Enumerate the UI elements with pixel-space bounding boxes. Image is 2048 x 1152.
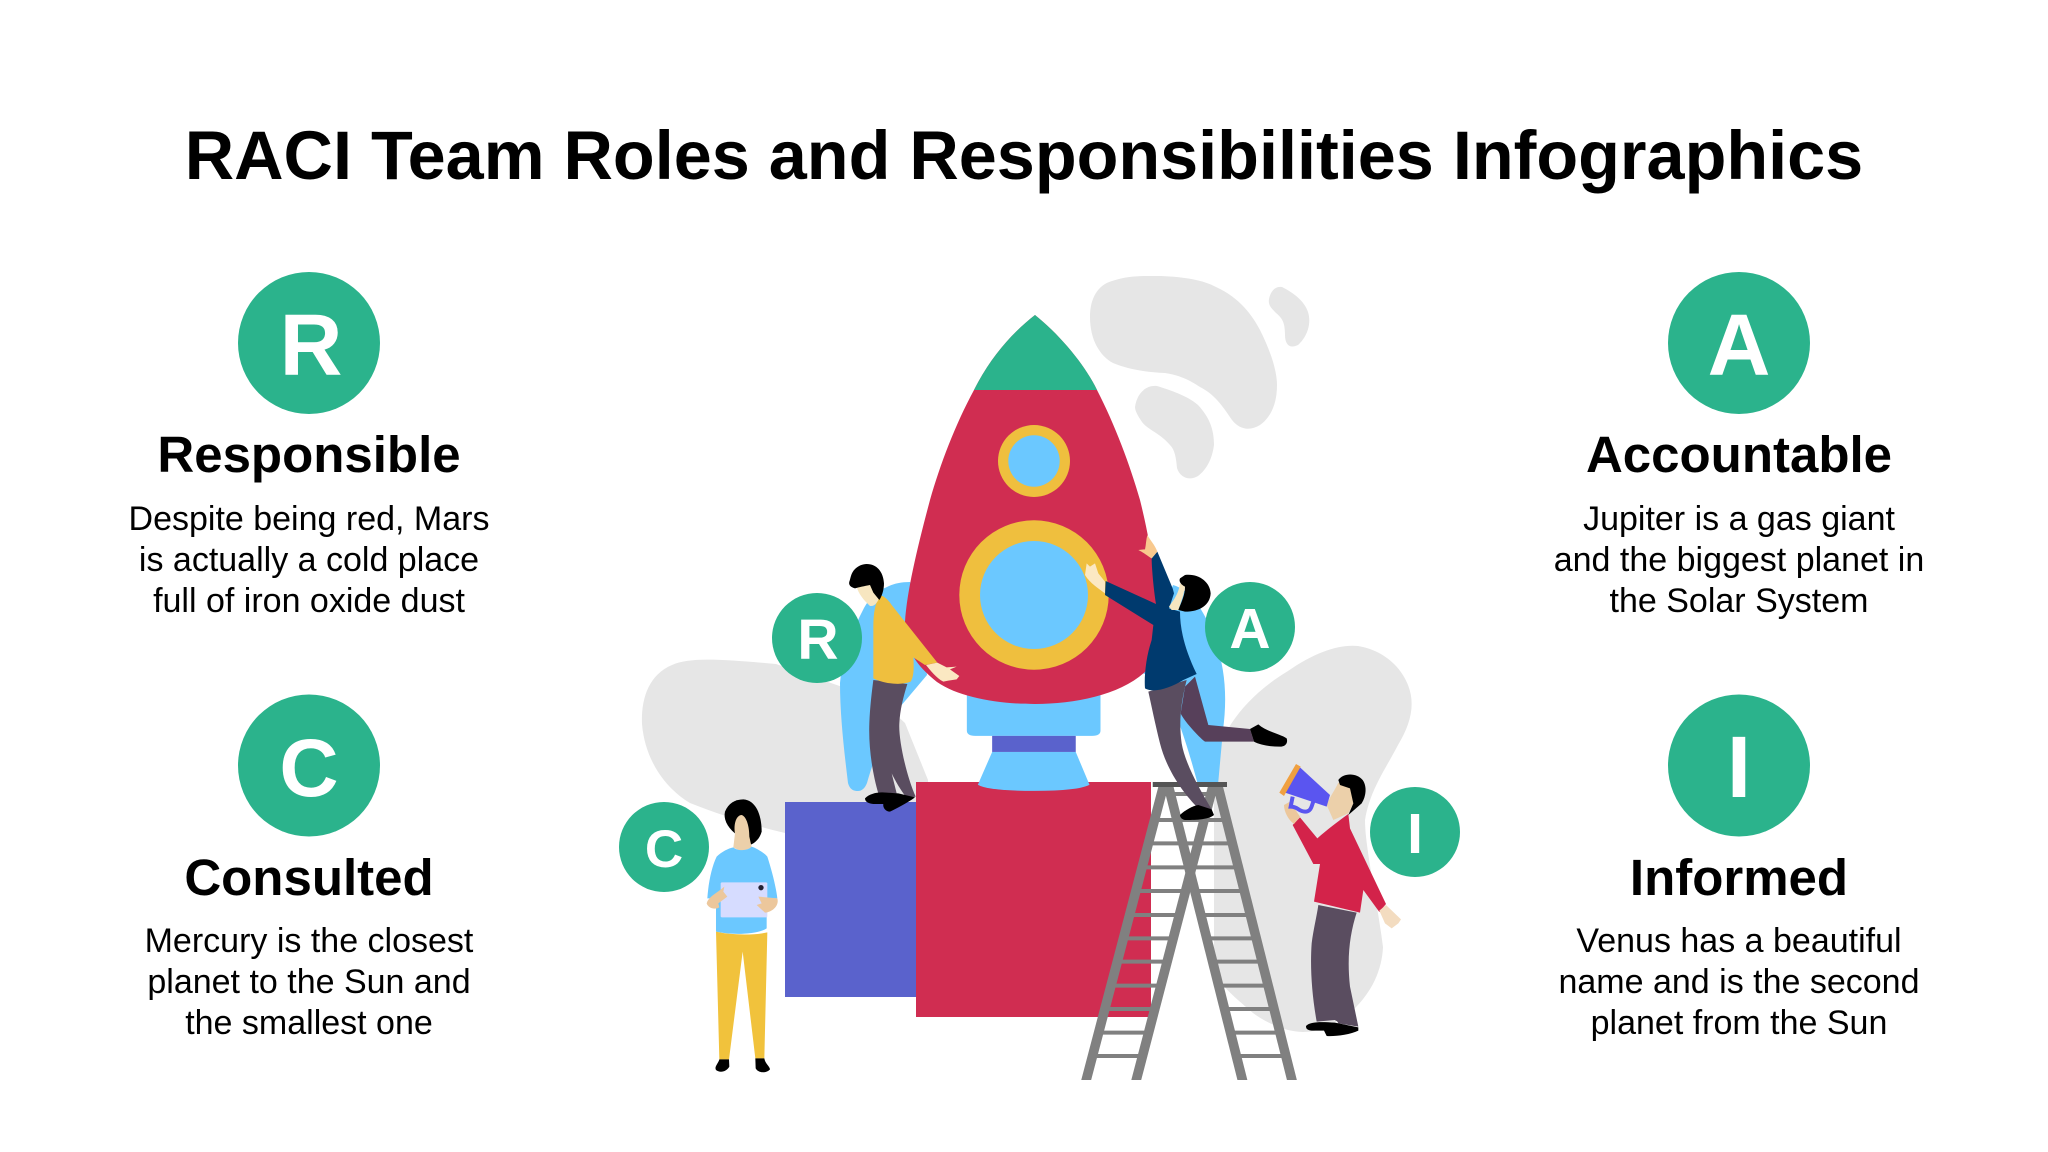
ladder [1081, 782, 1297, 1080]
red block [916, 782, 1151, 1017]
badge R large [238, 272, 380, 414]
text: Consulted description [145, 922, 474, 1042]
badge A small: A [1229, 597, 1271, 661]
rocket body [905, 315, 1158, 704]
text: Informed description [1558, 922, 1920, 1042]
badge I small: I [1407, 802, 1423, 866]
heading: Consulted: Consulted [184, 849, 434, 906]
background smoke blobs [642, 276, 1412, 1032]
text: Consulted description: planet to the Sun and [147, 963, 471, 1001]
text: Consulted description: Mercury is the closest [145, 922, 473, 960]
person A: navy jacket reaching up [1085, 535, 1287, 820]
badge R small [772, 593, 862, 683]
person R: yellow sweater [849, 564, 959, 812]
rocket nozzle [967, 694, 1100, 736]
rocket engine base [978, 736, 1090, 791]
badge R large: R [280, 297, 342, 394]
person I: red jacket with megaphone [1279, 764, 1401, 1036]
badge C large: C [279, 723, 339, 814]
title: RACI Team Roles and Responsibilities Infographics [185, 118, 1863, 194]
text: Responsible description: full of iron oxide dust [153, 582, 465, 620]
text: Responsible description: Despite being red, Mars [129, 500, 489, 538]
text: Responsible description: is actually a cold place [139, 540, 479, 578]
text: Accountable description: Jupiter is a gas giant [1583, 500, 1895, 538]
text: Accountable description [1554, 500, 1924, 620]
text: Informed description: name and is the second [1558, 963, 1920, 1001]
badge I large: I [1727, 719, 1751, 816]
rocket right fin [1140, 585, 1225, 785]
heading: Informed: Informed [1630, 849, 1848, 906]
purple block [785, 802, 917, 997]
badge I large [1668, 694, 1810, 836]
text: Consulted description: the smallest one [185, 1004, 433, 1042]
person C: holding tablet [707, 799, 778, 1072]
text: Informed description: Venus has a beautiful [1576, 922, 1902, 960]
small porthole [998, 425, 1070, 497]
badge A small [1205, 582, 1295, 672]
badge R small: R [797, 608, 839, 672]
rocket left fin [840, 582, 927, 791]
rocket nose cone [974, 315, 1097, 390]
large porthole [959, 520, 1109, 670]
text: Accountable description: and the biggest planet in [1554, 540, 1924, 578]
text: Accountable description: the Solar System [1610, 582, 1868, 620]
text: Informed description: planet from the Sun [1591, 1004, 1887, 1042]
heading: Responsible: Responsible [157, 426, 461, 483]
text: Responsible description [129, 500, 489, 620]
badge C large [238, 694, 380, 836]
badge A large: A [1708, 297, 1770, 394]
badge C small [619, 802, 709, 892]
badge I small [1370, 787, 1460, 877]
badge A large [1668, 272, 1810, 414]
badge C small: C [645, 820, 683, 879]
heading: Accountable: Accountable [1586, 426, 1892, 483]
